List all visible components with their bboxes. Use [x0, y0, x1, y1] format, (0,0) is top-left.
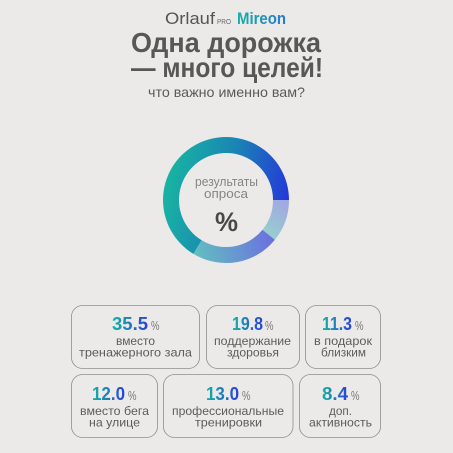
- card: 11.3%: близким: [321, 346, 366, 360]
- card: 12.0%: вместо бега: [80, 404, 149, 418]
- card: 35.5%: %: [151, 319, 160, 333]
- card: 19.8%: здоровья: [227, 346, 279, 360]
- card: 19.8%: %: [265, 319, 274, 333]
- segment: light arc: [262, 200, 289, 240]
- card: 11.3%: в подарок: [314, 334, 373, 348]
- title: [131, 27, 323, 83]
- card: 13.0%: профессиональные: [172, 404, 284, 418]
- card: 8.4%: %: [351, 389, 360, 403]
- title: — много целей!: [131, 52, 323, 83]
- card: 13.0%: [164, 374, 293, 438]
- logos: Orlauf: [165, 10, 215, 28]
- donut chart: [163, 137, 289, 263]
- card: 13.0%: %: [242, 389, 250, 403]
- card: 35.5%: тренажерного зала: [79, 346, 192, 360]
- card: 13.0%: 13.0: [206, 383, 239, 404]
- card: 12.0%: 12.0: [92, 383, 125, 404]
- donut centre label: результаты: [195, 175, 258, 189]
- card: 19.8%: 19.8: [232, 313, 263, 334]
- card: 8.4%: доп.: [329, 404, 352, 418]
- logos: Mireon: [237, 10, 286, 28]
- card: 19.8%: поддержание: [214, 334, 291, 348]
- title: Одна дорожка: [131, 27, 321, 58]
- card: 11.3%: [306, 306, 380, 368]
- card: 35.5%: вместо: [116, 334, 155, 348]
- donut centre label: [195, 175, 258, 237]
- segment: middle arc: [193, 230, 275, 263]
- donut centre label: %: [215, 207, 238, 237]
- card: 35.5%: 35.5: [112, 313, 148, 334]
- card: 8.4%: активность: [309, 416, 372, 430]
- card: 12.0%: [72, 374, 158, 438]
- donut centre label: опроса: [204, 187, 248, 201]
- card: 8.4%: 8.4: [322, 383, 349, 404]
- card: 12.0%: %: [128, 389, 136, 403]
- logos: [165, 10, 286, 28]
- segment: largest arc: [163, 137, 289, 254]
- card: 12.0%: на улице: [89, 416, 140, 430]
- card: 8.4%: [300, 374, 380, 438]
- logos: PRO: [217, 17, 231, 26]
- card: 35.5%: [72, 306, 200, 368]
- card: 11.3%: %: [355, 319, 364, 333]
- card: 19.8%: [206, 306, 300, 368]
- card: 11.3%: 11.3: [322, 313, 352, 334]
- card: 13.0%: тренировки: [195, 416, 262, 430]
- subtitle: что важно именно вам?: [148, 84, 305, 100]
